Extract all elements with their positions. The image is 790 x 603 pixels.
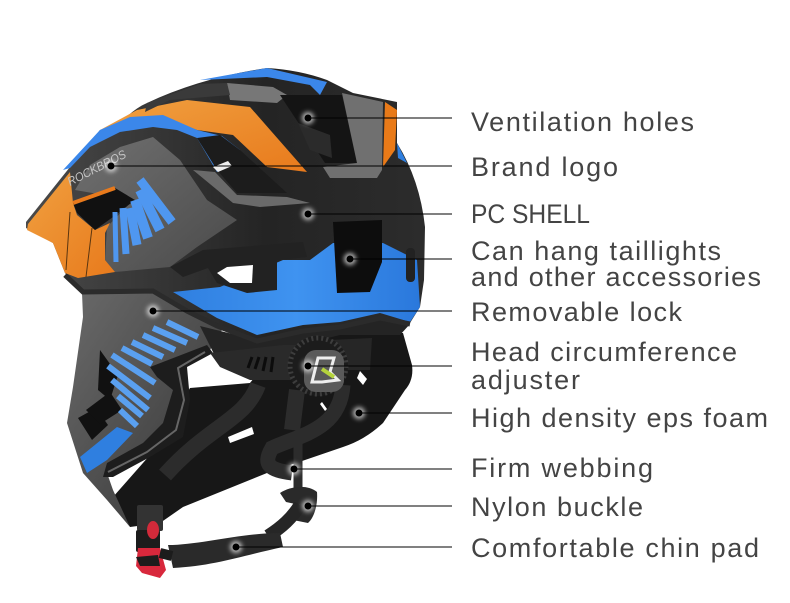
callout: PC shell: PC SHELL [471, 199, 590, 229]
gray side panel [75, 137, 237, 272]
side vent gap [213, 161, 232, 172]
callout: PC shell [302, 199, 590, 229]
callout: nylon buckle: Nylon buckle [471, 492, 643, 522]
gray strip below side vent [193, 170, 310, 207]
right blue accent [397, 143, 407, 163]
nylon buckle [280, 487, 317, 523]
right orange panel [383, 102, 397, 167]
vent strap detail [298, 123, 332, 158]
callout: chin pad: Comfortable chin pad [471, 533, 759, 563]
callout: taillights: Can hang taillights [471, 236, 721, 266]
callout: ventilation holes: Ventilation holes [471, 107, 694, 137]
shell base [26, 68, 425, 340]
blue top swath [63, 115, 240, 172]
rim trim [65, 275, 410, 341]
callout: head circumference adjuster: adjuster [471, 365, 580, 395]
callout: eps foam: High density eps foam [471, 403, 768, 433]
accessory vent [333, 220, 382, 293]
chin pad [168, 533, 283, 568]
strap connector [160, 553, 172, 556]
visor vent [73, 188, 135, 230]
foam liner [113, 333, 412, 527]
rim highlight [108, 352, 205, 472]
guard stripes [108, 322, 198, 426]
foam openings [228, 371, 367, 443]
callout: nylon buckle [302, 492, 643, 522]
visor panel seams [66, 212, 92, 277]
lower side vent [170, 242, 307, 293]
right slot [406, 248, 415, 282]
callout: brand logo: Brand logo [471, 152, 618, 182]
helmet illustration [26, 68, 425, 578]
orange top swath [100, 100, 307, 172]
guard side vents [78, 350, 122, 440]
lower side vent opening [217, 265, 253, 283]
side release buckle [136, 505, 166, 578]
dial adjuster [288, 336, 348, 396]
callout: firm webbing: Firm webbing [471, 453, 653, 483]
chin guard [67, 290, 225, 527]
callout: head circumference adjuster: Head circumference [471, 337, 737, 367]
rear harness [330, 338, 372, 370]
side vent [197, 135, 287, 193]
callout: firm webbing [288, 453, 653, 483]
harness slits [248, 357, 273, 372]
brand logo text: ROCKBROS [65, 147, 128, 189]
orange visor [27, 172, 115, 278]
guard blue band [80, 427, 133, 473]
chin strap [268, 505, 300, 536]
callout: head circumference adjuster [302, 337, 737, 395]
callout: removable lock: Removable lock [471, 297, 682, 327]
top gray panels [227, 83, 287, 103]
callout: taillights: and other accessories [471, 262, 761, 292]
upper blue stripes [115, 180, 172, 262]
center top vent [280, 95, 357, 163]
callout: removable lock [147, 297, 682, 327]
under rim fill [200, 318, 410, 356]
straps [165, 385, 343, 492]
callout: brand logo [105, 152, 618, 182]
harness [210, 345, 300, 380]
callout: ventilation holes [302, 107, 694, 137]
lower blue band [173, 243, 420, 335]
top blue stripe [200, 68, 327, 95]
callout: chin pad [230, 533, 759, 563]
callout: taillights [344, 236, 761, 292]
right gray band [323, 93, 383, 178]
guard rim [103, 345, 213, 477]
